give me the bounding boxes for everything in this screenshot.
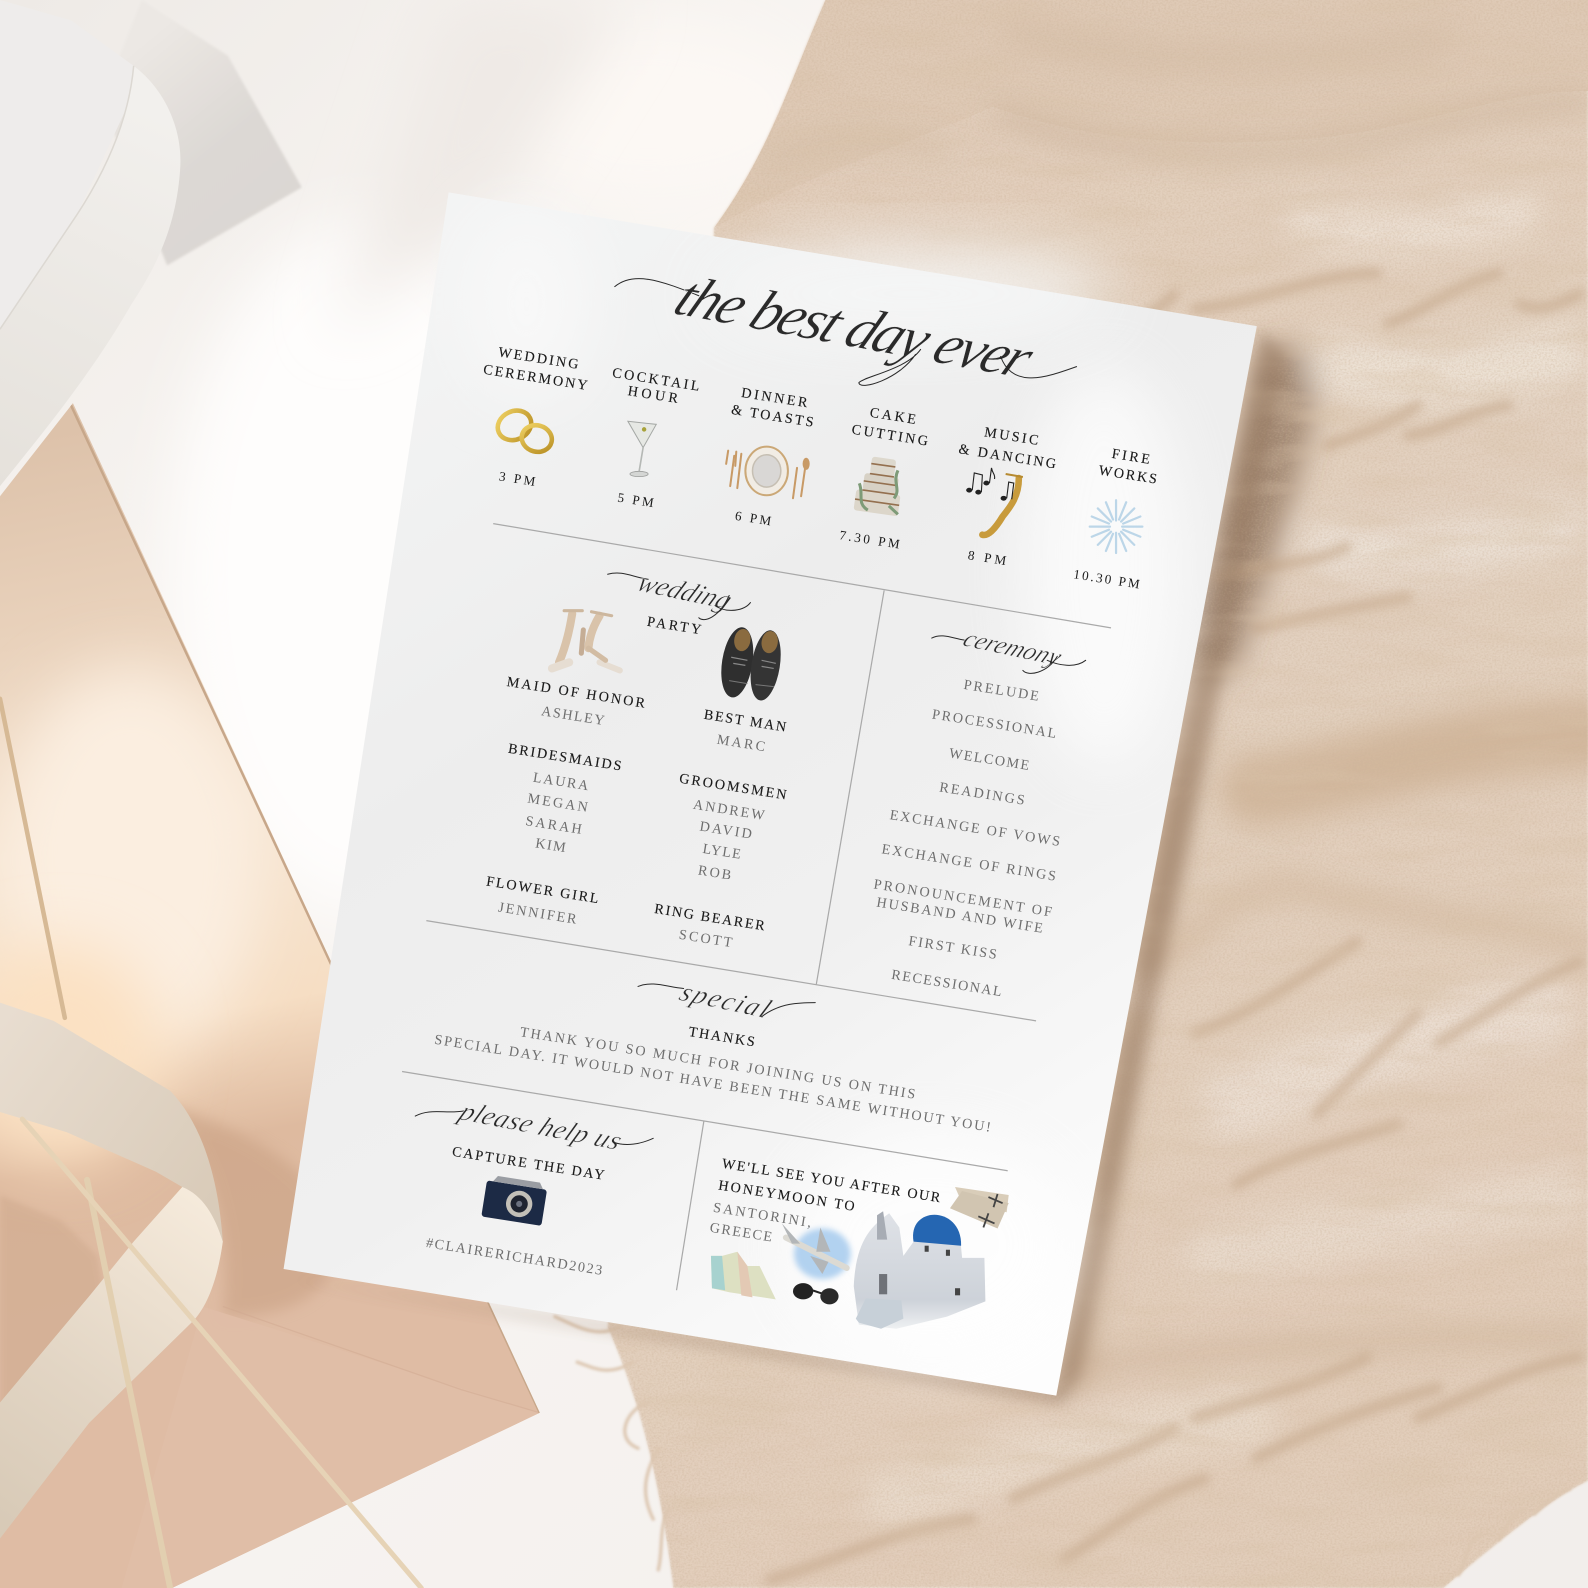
timeline: cake cutting: [838, 405, 929, 552]
panel: ceremony order: FIRST KISS: [907, 933, 998, 963]
timeline: music and dancing: [958, 424, 1057, 568]
heading: special: [638, 978, 815, 1024]
icon: nude sandals: [552, 611, 620, 670]
timeline: music and dancing: 8 PM: [967, 547, 1008, 568]
panel: ceremony order: PRELUDE: [962, 677, 1040, 705]
timeline: fireworks: 10.30 PM: [1072, 566, 1141, 592]
white program card: [284, 192, 1257, 1396]
panel: ceremony order: RECESSIONAL: [890, 967, 1003, 1000]
wedding party names: BRIDESMAIDS: [507, 741, 622, 774]
panel: ceremony order: EXCHANGE OF VOWS: [889, 807, 1061, 850]
timeline: fireworks: [1072, 446, 1158, 592]
wedding party names: ANDREW: [692, 797, 766, 824]
timeline: cocktail hour: HOUR: [627, 383, 680, 407]
timeline: fireworks: WORKS: [1098, 463, 1158, 488]
top-left satin ribbon: [0, 0, 180, 486]
wedding party names: ASHLEY: [540, 703, 606, 729]
divider lines: [402, 524, 1111, 1290]
heading: ceremony: ceremony: [958, 624, 1068, 671]
panel: special thanks: [433, 978, 992, 1136]
icon: firework burst: [1090, 500, 1142, 553]
icon: airplane over blue cloud: [782, 1223, 851, 1279]
wedding party names: JENNIFER: [497, 900, 578, 928]
icon: saxophone and notes: [966, 468, 1023, 535]
icon: camera: [481, 1174, 548, 1226]
heading: ceremony: [932, 624, 1086, 673]
timeline: cocktail hour: [611, 365, 701, 510]
lower satin ribbon: [0, 1003, 223, 1538]
panel: capture the day: CAPTURE THE DAY: [451, 1144, 606, 1184]
wedding party names: SARAH: [524, 813, 583, 838]
beige gauze fabric: [608, 0, 1588, 1588]
timeline: cocktail hour: 5 PM: [617, 490, 655, 510]
timeline: dinner and toasts: & TOASTS: [730, 402, 815, 431]
vellum sheet with shadow: [101, 0, 302, 265]
wedding party names: KIM: [534, 835, 567, 856]
heading: wedding party: PARTY: [646, 614, 702, 638]
thin sticks across the ribbon: [22, 1119, 421, 1588]
wedding party names: GROOMSMEN: [678, 771, 788, 803]
heading: wedding party: [608, 568, 750, 638]
title: the best day ever: [664, 265, 1046, 390]
wedding party names: MARC: [716, 732, 766, 755]
timeline: fireworks: FIRE: [1111, 446, 1151, 468]
timeline: cake cutting: CUTTING: [851, 422, 929, 450]
panel: ceremony order: PROCESSIONAL: [931, 706, 1057, 742]
icon: folded map: [711, 1252, 776, 1299]
wedding party names: MAID OF HONOR: [506, 674, 647, 712]
wedding party names: MEGAN: [526, 791, 589, 816]
fabric fringe bottom: [555, 1317, 1570, 1575]
panel: ceremony order: EXCHANGE OF RINGS: [881, 841, 1057, 885]
wedding party names: [485, 674, 788, 951]
panel: special thanks: THANK YOU SO MUCH FOR JOINING US ON THIS: [519, 1024, 916, 1103]
panel: ceremony order: [872, 624, 1086, 1000]
icon: gold rings: [493, 405, 555, 455]
icon: sunglasses: [793, 1283, 839, 1304]
timeline: music and dancing: MUSIC: [983, 424, 1040, 449]
panel: honeymoon: SANTORINI,: [712, 1200, 812, 1231]
wedding party names: LAURA: [532, 770, 590, 794]
heading: please help us: please help us: [452, 1097, 628, 1156]
timeline: wedding ceremony: [482, 344, 589, 489]
timeline: cake cutting: 7.30 PM: [838, 527, 901, 552]
panel: special thanks: THANKS: [687, 1024, 756, 1050]
peach envelope: [0, 403, 540, 1588]
panel: honeymoon: GREECE: [709, 1220, 773, 1245]
panel: honeymoon: HONEYMOON TO: [717, 1177, 856, 1215]
timeline: dinner and toasts: [726, 385, 815, 528]
wedding party names: FLOWER GIRL: [485, 874, 600, 907]
thin wooden stick behind ribbon: [0, 699, 65, 1018]
wedding party names: LYLE: [701, 841, 742, 863]
panel: ceremony order: PRONOUNCEMENT OF: [872, 876, 1053, 920]
panel: ceremony order: WELCOME: [948, 745, 1030, 774]
icon: plane tickets: [950, 1187, 1009, 1228]
panel: ceremony order: READINGS: [938, 779, 1026, 809]
panel: capture the day: #CLAIRERICHARD2023: [425, 1235, 603, 1279]
icon: black dress shoes: [717, 625, 785, 703]
timeline: music and dancing: & DANCING: [958, 441, 1057, 472]
timeline: wedding ceremony: 3 PM: [498, 468, 537, 489]
wedding party names: RING BEARER: [653, 901, 766, 934]
icon: place setting: [726, 447, 810, 498]
paper shadow: [288, 329, 1286, 1404]
timeline: dinner and toasts: 6 PM: [734, 508, 773, 528]
heading: special: special: [674, 978, 776, 1024]
timeline: wedding ceremony: WEDDING: [497, 344, 580, 373]
icon: tiered cake: [853, 455, 905, 516]
panel: ceremony order: HUSBAND AND WIFE: [875, 895, 1044, 937]
wedding party names: SCOTT: [678, 927, 734, 951]
timeline: wedding ceremony: CERERMONY: [482, 362, 589, 394]
icon: Santorini church: [854, 1211, 985, 1329]
panel: capture the day: [415, 1097, 653, 1279]
heading: wedding party: wedding: [632, 568, 738, 616]
timeline: dinner and toasts: DINNER: [740, 385, 809, 411]
icon: martini glass: [628, 421, 656, 477]
timeline: cake cutting: CAKE: [869, 405, 917, 428]
panel: honeymoon: WE'LL SEE YOU AFTER OUR: [721, 1156, 942, 1206]
wedding party names: DAVID: [698, 819, 753, 843]
wedding party names: BEST MAN: [703, 707, 787, 736]
timeline: cocktail hour: COCKTAIL: [611, 365, 701, 395]
panel: honeymoon: [709, 1156, 1009, 1329]
panel: special thanks: SPECIAL DAY. IT WOULD NOT HAVE BEEN THE SAME WITHOUT YOU!: [433, 1032, 992, 1136]
wedding party names: ROB: [697, 863, 732, 884]
